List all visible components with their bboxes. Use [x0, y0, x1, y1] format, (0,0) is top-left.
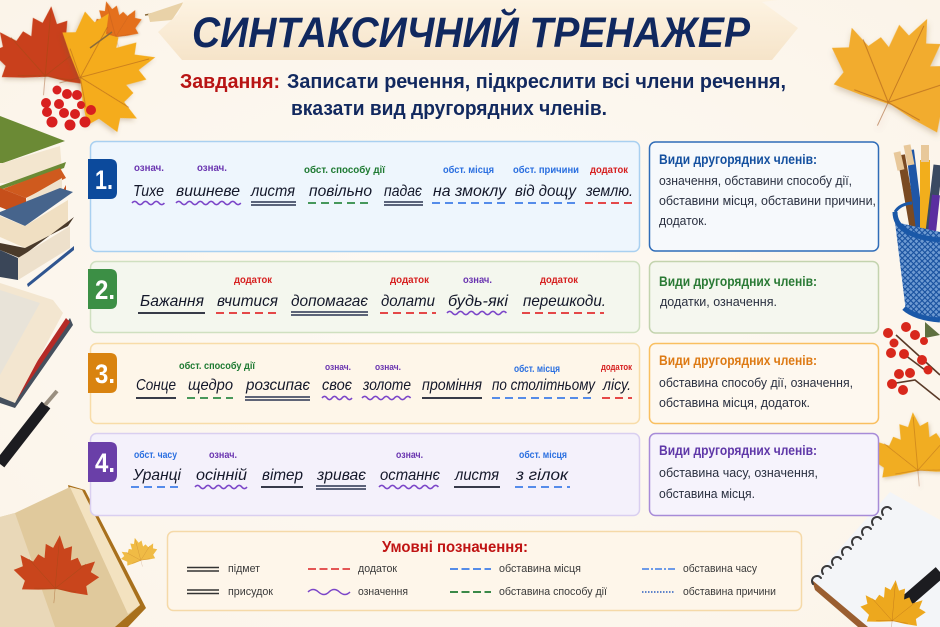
badge: number 2 — [88, 269, 117, 309]
side panel: answer 1: Види другорядних членів: — [659, 152, 817, 167]
panel: sentence 3 — [88, 344, 640, 424]
side panel: answer 2 — [650, 262, 878, 333]
task text: Завдання: — [180, 71, 280, 93]
side panel: answer 2: Види другорядних членів: — [659, 274, 817, 289]
side panel: answer 1: означення, обставини способу дії, — [659, 173, 852, 188]
illustration: pencil cup — [895, 145, 940, 320]
words sentence 3: Сонце — [136, 377, 176, 394]
grammar labels sentence 2 — [234, 275, 579, 286]
badge: number 4 — [88, 442, 117, 482]
words sentence 3: розсипає — [245, 377, 310, 394]
legend title: Умовні позначення: — [382, 539, 528, 556]
side panel: answer 3: обставина місця, додаток. — [659, 395, 810, 410]
grammar labels sentence 1 — [134, 163, 629, 176]
words sentence 3: по столітньому — [492, 377, 596, 394]
icon: small yellow leaf — [117, 533, 161, 571]
words sentence 3: золоте — [362, 377, 411, 394]
grammar labels sentence 1: означ. — [197, 163, 227, 174]
legend: обставина часу: обставина часу — [683, 563, 757, 575]
grammar labels sentence 1: обст. місця — [443, 164, 494, 176]
legend: підмет: підмет — [228, 563, 260, 575]
panel: sentence 2 — [88, 262, 640, 332]
words sentence 1: землю. — [585, 183, 633, 200]
words sentence 1: повільно — [309, 183, 372, 200]
legend: обставина причини — [642, 586, 776, 598]
words sentence 4: Уранці — [132, 467, 181, 484]
task text: вказати вид другорядних членів. — [291, 98, 607, 120]
legend: додаток — [308, 563, 397, 575]
words sentence 2: допомагає — [291, 293, 368, 310]
title banner — [158, 0, 798, 60]
side panel: answer 1: додаток. — [659, 213, 707, 228]
illustration: autumn leaves and berries top left — [0, 0, 184, 143]
underlines sentence 4 — [131, 485, 570, 489]
grammar labels sentence 3: обст. способу дії — [179, 360, 255, 372]
grammar labels sentence 2: додаток — [540, 275, 579, 286]
words sentence 1: на змоклу — [433, 183, 507, 200]
illustration: red berries branch right — [883, 322, 940, 400]
grammar labels sentence 3: означ. — [375, 362, 401, 372]
words sentence 3 — [136, 377, 631, 394]
words sentence 2 — [140, 293, 606, 310]
side panel: answer 3: Види другорядних членів: — [659, 353, 817, 368]
grammar labels sentence 4: обст. місця — [519, 449, 567, 461]
words sentence 4: вітер — [262, 467, 303, 484]
side panel: answer 1: обставини місця, обставини причини, — [659, 193, 876, 208]
side panel: answer 4: обставина часу, означення, — [659, 465, 818, 480]
words sentence 2: Бажання — [140, 293, 204, 310]
illustration: yellow leaf right — [866, 408, 940, 490]
words sentence 1: від дощу — [515, 183, 577, 200]
grammar labels sentence 1: обст. причини — [513, 164, 579, 176]
task text: Записати речення, підкреслити всі члени речення, — [287, 71, 786, 93]
grammar labels sentence 3: додаток — [601, 362, 632, 372]
legend: обставина місця — [450, 563, 581, 575]
legend: обставина часу — [642, 563, 757, 575]
words sentence 4: з гілок — [515, 467, 570, 484]
words sentence 4: осінній — [196, 467, 247, 484]
legend: обставина причини: обставина причини — [683, 586, 776, 598]
grammar labels sentence 2: означ. — [463, 275, 492, 286]
underlines sentence 2 — [138, 311, 604, 315]
legend: додаток: додаток — [358, 563, 397, 575]
side panel: answer 1 — [650, 142, 878, 251]
words sentence 4: останнє — [380, 467, 440, 484]
illustration: open book with red leaf — [0, 485, 146, 627]
illustration: stack of books — [0, 116, 74, 287]
badge: number 3 — [88, 353, 117, 393]
legend: означення: означення — [358, 586, 408, 598]
badge: number 4: 4. — [95, 448, 115, 478]
grammar labels sentence 2: додаток — [234, 275, 273, 286]
legend: присудок: присудок — [228, 586, 273, 598]
legend: означення — [308, 586, 408, 598]
grammar labels sentence 1: означ. — [134, 163, 164, 174]
words sentence 2: будь-які — [448, 293, 508, 310]
grammar labels sentence 1: додаток — [590, 165, 629, 176]
words sentence 3: лісу. — [602, 377, 631, 394]
words sentence 4: листя — [454, 467, 499, 484]
legend: підмет — [187, 563, 260, 575]
words sentence 3: своє — [322, 377, 352, 394]
words sentence 1 — [133, 183, 633, 200]
words sentence 1: листя — [250, 183, 295, 200]
words sentence 2: долати — [381, 293, 435, 310]
grammar labels sentence 4: обст. часу — [134, 449, 177, 461]
grammar labels sentence 3 — [179, 360, 632, 375]
side panel: answer 2: додатки, означення. — [660, 294, 777, 309]
words sentence 3: проміння — [422, 377, 482, 394]
task text — [180, 71, 786, 120]
illustration: open book left — [0, 283, 73, 408]
words sentence 4: зриває — [316, 467, 366, 484]
words sentence 1: падає — [384, 183, 422, 200]
legend: обставина місця: обставина місця — [499, 563, 581, 575]
grammar labels sentence 2: додаток — [390, 275, 430, 286]
illustration: pen left — [0, 391, 57, 464]
words sentence 2: перешкоди. — [523, 293, 606, 310]
side panel: answer 3: обставина способу дії, означення, — [659, 375, 853, 390]
words sentence 2: вчитися — [217, 293, 278, 310]
badge: number 2: 2. — [95, 275, 115, 305]
badge: number 1 — [88, 159, 117, 199]
illustration: notebook with pen and leaf — [812, 492, 940, 627]
grammar labels sentence 4: означ. — [396, 450, 423, 461]
panel: sentence 4 — [88, 434, 640, 516]
panel: sentence 1 — [88, 142, 640, 252]
grammar labels sentence 3: означ. — [325, 362, 351, 372]
badge: number 3: 3. — [95, 359, 115, 389]
grammar labels sentence 4 — [134, 449, 567, 461]
words sentence 1: Тихе — [133, 183, 164, 200]
side panel: answer 4: обставина місця. — [659, 486, 755, 501]
side panel: answer 4 — [650, 434, 878, 516]
illustration: maple leaf top right — [810, 0, 940, 157]
title: СИНТАКСИЧНИЙ ТРЕНАЖЕР — [192, 7, 750, 57]
side panel: answer 4: Види другорядних членів: — [659, 443, 817, 458]
grammar labels sentence 4: означ. — [209, 450, 237, 461]
words sentence 1: вишневе — [176, 183, 240, 200]
underlines sentence 1 — [132, 201, 633, 205]
badge: number 1: 1. — [95, 165, 113, 195]
words sentence 4 — [132, 467, 570, 484]
grammar labels sentence 3: обст. місця — [514, 363, 560, 375]
underlines sentence 3 — [136, 396, 632, 400]
legend: обставина способу дії: обставина способу дії — [499, 586, 607, 598]
legend: присудок — [187, 586, 273, 598]
words sentence 3: щедро — [188, 377, 233, 394]
legend panel — [168, 532, 802, 610]
grammar labels sentence 1: обст. способу дії — [304, 164, 385, 176]
side panel: answer 3 — [650, 344, 878, 424]
